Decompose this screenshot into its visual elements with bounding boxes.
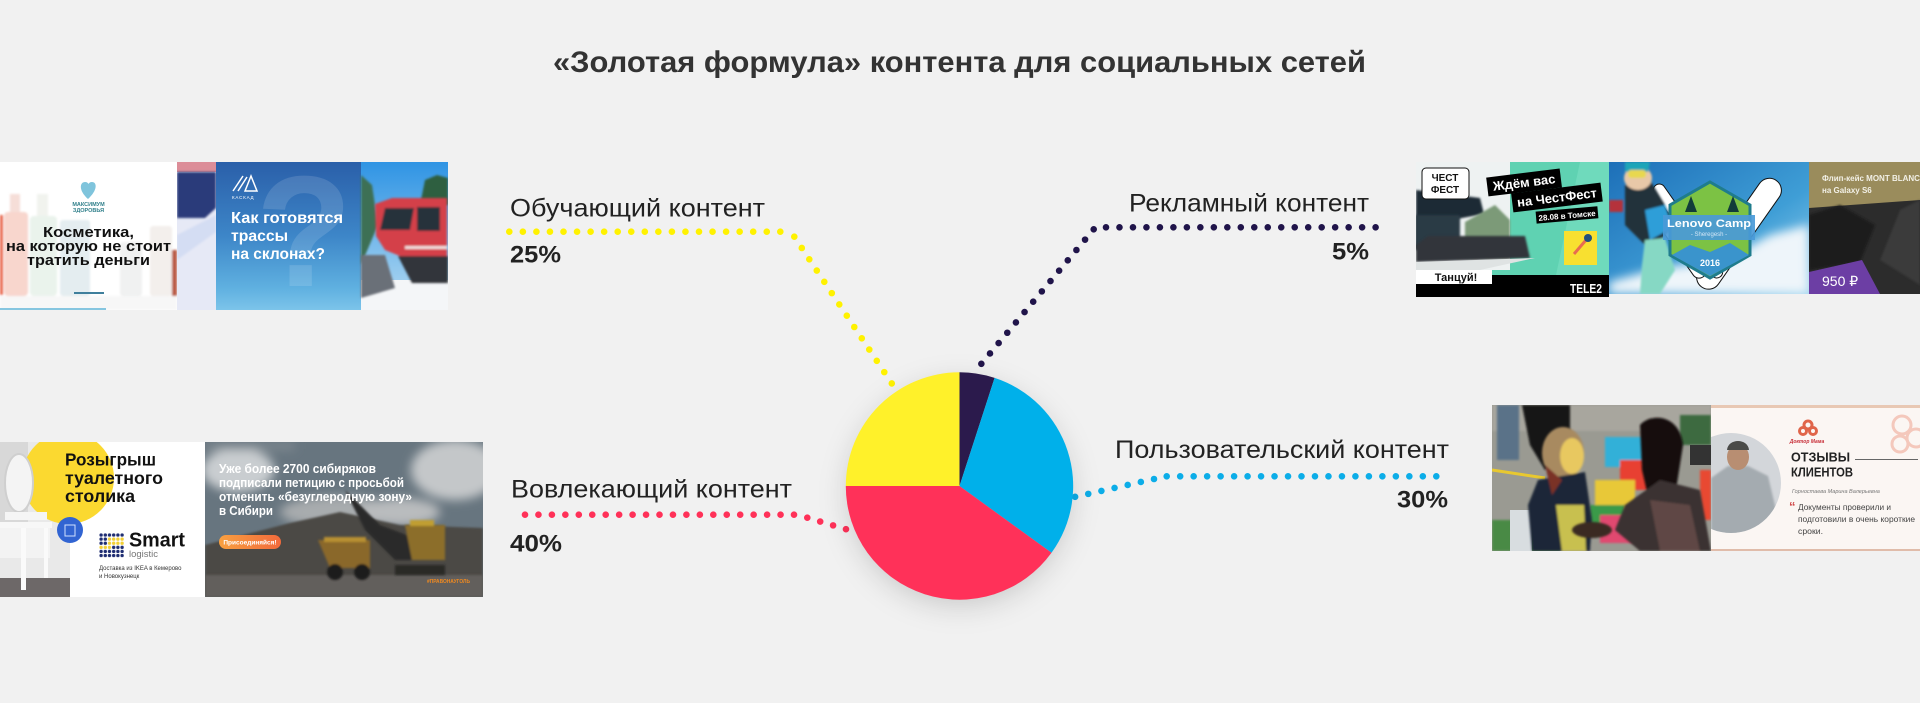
woman xyxy=(1572,418,1711,551)
banner group: educational content examples xyxy=(0,162,448,310)
product name: Флип-кейс MONT BLANC xyxy=(1822,174,1920,183)
button xyxy=(219,535,281,549)
banner: furniture raffle xyxy=(0,432,205,597)
banner group: advertising content examples xyxy=(1416,162,1920,297)
delivery note: Доставка из IKEA в Кемерово xyxy=(99,566,182,572)
banner headline xyxy=(231,212,342,259)
banner headline xyxy=(66,454,162,502)
icon: blue badge xyxy=(57,517,83,543)
photo: face painting xyxy=(1492,405,1711,551)
dotted leader: blue xyxy=(1074,476,1436,497)
banner: ski slopes xyxy=(177,162,448,310)
label: advertising content: 5% xyxy=(1332,238,1369,265)
brand tagline: logistic xyxy=(129,549,158,560)
label: dance: Танцуй! xyxy=(1435,272,1477,284)
camp badge: 2016 xyxy=(1700,258,1720,268)
button: Присоединяйся! xyxy=(223,538,277,546)
camp badge xyxy=(1663,182,1755,278)
delivery note: и Новокузнецк xyxy=(99,574,140,580)
banner: Lenovo Camp xyxy=(1609,162,1809,294)
banner heading: КЛИЕНТОВ xyxy=(1791,465,1853,480)
quote mark: “ xyxy=(1789,499,1796,514)
label: engaging content xyxy=(510,475,793,557)
banner: phone case xyxy=(1809,162,1920,294)
camp badge: - Sheregesh - xyxy=(1691,232,1727,238)
slice: advertising 5% xyxy=(960,372,995,486)
dotted leader: yellow xyxy=(509,232,892,384)
banner headline: на которую не стоит xyxy=(6,239,171,255)
banner headline xyxy=(6,225,171,269)
review quote: сроки. xyxy=(1798,526,1823,536)
slice: engaging 40% xyxy=(846,486,1052,600)
banner: coal petition xyxy=(202,440,499,597)
banner headline: Уже более 2700 сибиряков xyxy=(219,461,376,476)
banner headline: в Сибири xyxy=(219,503,273,518)
review quote xyxy=(1798,502,1915,536)
banner headline: отменить «безуглеродную зону» xyxy=(219,489,412,504)
banner heading xyxy=(1791,450,1853,480)
banner headline: на склонах? xyxy=(231,246,325,263)
icon: microphone xyxy=(1564,231,1597,265)
label: educational content: Обучающий контент xyxy=(510,195,766,223)
decorative flower xyxy=(1892,416,1920,452)
banner headline: подписали петицию с просьбой xyxy=(219,475,404,490)
label: educational content xyxy=(510,195,766,269)
camp badge: Lenovo Camp xyxy=(1667,218,1751,230)
review quote: Документы проверили и xyxy=(1798,502,1891,512)
girl xyxy=(1528,427,1592,551)
banner headline: туалетного xyxy=(65,468,163,488)
mining machinery xyxy=(318,490,445,580)
label: festival name: на ЧестФест xyxy=(1516,185,1598,210)
label: educational content: 25% xyxy=(510,242,561,269)
label: date: 28.08 в Томске xyxy=(1538,209,1597,223)
review quote: подготовили в очень короткие xyxy=(1798,514,1915,524)
snowboarder xyxy=(1609,162,1675,294)
banner headline: тратить деньги xyxy=(27,253,150,269)
label: engaging content: 40% xyxy=(510,530,562,557)
icon: dotted logo xyxy=(99,533,124,558)
title: «Золотая формула» контента для социальных сетей xyxy=(553,46,1366,79)
banner group: engaging content examples xyxy=(0,432,499,597)
banner headline: трассы xyxy=(231,228,288,245)
slice: user 30% xyxy=(960,378,1073,553)
logo: festival: ЧЕСТ xyxy=(1432,173,1458,184)
logo: festival xyxy=(1422,168,1469,199)
dotted leader: red xyxy=(525,515,846,529)
banner headline: столика xyxy=(65,486,135,506)
brand name: КАСКАД xyxy=(232,195,254,200)
icon: mirror xyxy=(5,454,33,512)
label: dance xyxy=(1416,270,1492,284)
banner heading: ОТЗЫВЫ xyxy=(1791,450,1850,465)
label: advertising content xyxy=(1129,189,1370,265)
brand name: Доктор Мама xyxy=(1789,439,1824,445)
dotted leader: dark xyxy=(981,227,1376,364)
banner: client reviews xyxy=(1681,405,1920,551)
label: user content xyxy=(1115,436,1450,513)
hashtag: #ПРАВОНАУГОЛЬ xyxy=(427,579,470,585)
price: 950 ₽ xyxy=(1822,273,1858,289)
icon: mountain logo xyxy=(233,176,257,191)
banner headline xyxy=(219,461,412,518)
banner headline: Розыгрыш xyxy=(65,450,156,470)
banner: cosmetics xyxy=(0,162,177,310)
brand name: Smart xyxy=(129,530,185,552)
icon: heart logo xyxy=(81,182,96,199)
label: user content: 30% xyxy=(1397,486,1448,513)
slice: educational 25% xyxy=(846,372,960,486)
icon: flower logo xyxy=(1800,421,1816,434)
snowboards xyxy=(1653,178,1782,290)
label: advertising content: Рекламный контент xyxy=(1129,189,1370,217)
logo: festival: ФЕСТ xyxy=(1431,185,1459,196)
banner group: user content examples xyxy=(1492,405,1920,551)
product name: на Galaxy S6 xyxy=(1822,186,1872,195)
label: engaging content: Вовлекающий контент xyxy=(511,475,793,503)
question mark: ? xyxy=(256,144,352,320)
client portrait xyxy=(1681,433,1782,535)
pie chart xyxy=(846,372,1073,600)
label: user content: Пользовательский контент xyxy=(1115,436,1450,464)
crowd xyxy=(1416,236,1530,262)
banner headline: Косметика, xyxy=(43,225,134,241)
colourful blocks xyxy=(1590,437,1711,543)
banner: Tele2 festival xyxy=(1416,162,1609,297)
brand name: МАКСИМУМ xyxy=(72,202,105,208)
brand name: TELE2 xyxy=(1570,281,1602,296)
banner headline: Как готовятся xyxy=(231,210,343,227)
pie shadow xyxy=(848,382,1072,606)
brand name: ЗДОРОВЬЯ xyxy=(73,208,104,214)
photo: snowcat xyxy=(361,162,448,310)
label: invitation xyxy=(1486,169,1562,196)
client name: Горностаева Марина Валерьевна xyxy=(1792,489,1880,495)
label: invitation: Ждём вас xyxy=(1491,171,1556,194)
